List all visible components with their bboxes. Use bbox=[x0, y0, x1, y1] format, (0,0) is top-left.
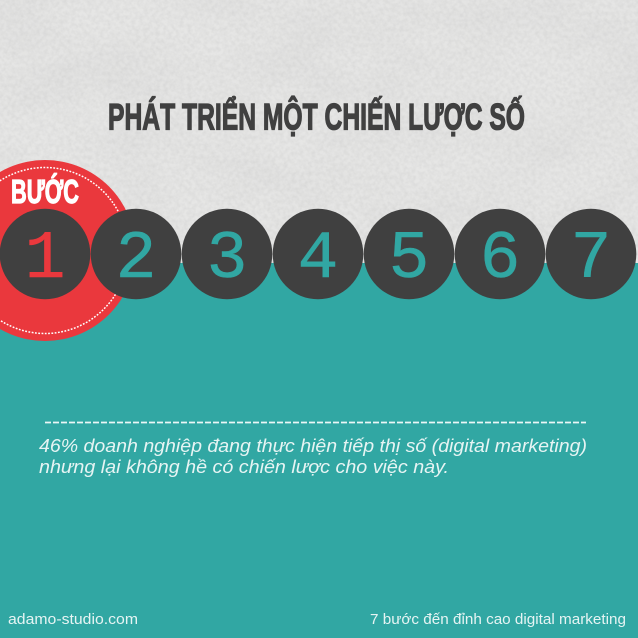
step 5 circle bbox=[364, 209, 454, 299]
statistic text bbox=[39, 436, 587, 477]
background: teal panel bbox=[0, 263, 638, 638]
step 5 circle: 5 bbox=[389, 221, 429, 298]
step 6 circle: 6 bbox=[480, 221, 520, 298]
step 7 circle: 7 bbox=[571, 221, 611, 298]
step 4 circle: 4 bbox=[298, 221, 338, 298]
footer: deck title: 7 bước đến đỉnh cao digital marketing bbox=[370, 611, 626, 628]
statistic text: 46% doanh nghiệp đang thực hiện tiếp thị số (digital marketing) bbox=[39, 436, 587, 456]
step 1 circle bbox=[0, 209, 90, 299]
step 3 circle bbox=[182, 209, 272, 299]
step 2 circle bbox=[91, 209, 181, 299]
step 4 circle bbox=[273, 209, 363, 299]
statistic text: nhưng lại không hề có chiến lược cho việc này. bbox=[39, 457, 449, 477]
dashed divider bbox=[45, 422, 586, 424]
step 7 circle bbox=[546, 209, 636, 299]
step badge: red circle bbox=[0, 160, 136, 341]
footer: website: adamo-studio.com bbox=[8, 611, 138, 628]
step 3 circle: 3 bbox=[207, 221, 247, 298]
step 1 circle: 1 bbox=[25, 221, 65, 298]
step 6 circle bbox=[455, 209, 545, 299]
badge label: BƯỚC bbox=[11, 173, 79, 210]
background: paper texture bbox=[0, 0, 638, 264]
step 2 circle: 2 bbox=[116, 221, 156, 298]
